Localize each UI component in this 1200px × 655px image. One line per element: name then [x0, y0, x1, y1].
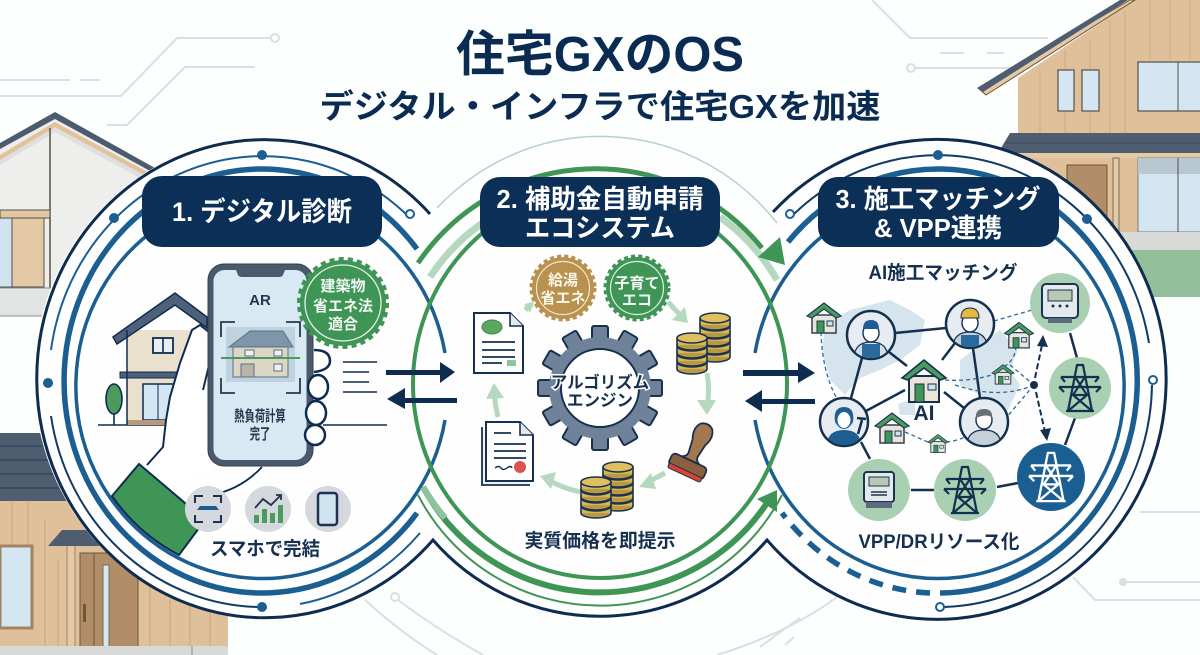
- icon: approved document: [482, 422, 533, 485]
- arrows: between 1 and 2: [386, 362, 457, 409]
- map backdrop: [822, 300, 1020, 420]
- subtitle: デジタル・インフラで住宅GXを加速: [320, 88, 880, 125]
- cycle arrows: [495, 302, 708, 492]
- seal: child eco: 子育て: [614, 275, 660, 292]
- phone text: 熱負荷計算: [234, 408, 309, 425]
- icon: AR scan frame: [221, 322, 300, 393]
- icon: worker 1: [847, 311, 895, 359]
- seal: hot water: 給湯: [548, 272, 578, 289]
- arrows: between 2 and 3: [743, 362, 815, 412]
- icon: coins upper: [677, 313, 730, 374]
- icon: worker 4: [960, 398, 1008, 446]
- label: algorithm engine: エンジン: [567, 392, 633, 410]
- icon: smartphone: [305, 486, 351, 532]
- heading: panel 3: & VPP連携: [874, 213, 1002, 243]
- icon: tower highlighted: [1017, 443, 1085, 511]
- label: AR: AR: [249, 292, 271, 309]
- seal: hot water: 省エネ: [540, 289, 586, 307]
- icon: smart meter lower: [848, 459, 910, 521]
- rings: circle 3: [755, 150, 1157, 611]
- icon: phone: [208, 264, 313, 466]
- heading: panel 3: 3. 施工マッチング: [836, 184, 1040, 214]
- icons: small houses: [807, 303, 1033, 452]
- panel: 3 matching and VPP: [807, 177, 1111, 553]
- house: lower left: [0, 433, 228, 655]
- icon: worker 2: [946, 300, 994, 348]
- badge: building energy law: 適合: [328, 315, 358, 333]
- panel: 2 subsidy ecosystem: [474, 177, 730, 552]
- badge: building energy law: 建築物: [320, 277, 366, 295]
- heading: panel 3: [818, 177, 1059, 247]
- icon: stamp: [666, 416, 725, 483]
- icon: application form: [474, 313, 523, 373]
- circle backgrounds: [34, 139, 1167, 620]
- rings: circle 2 green: [413, 136, 787, 606]
- icon: smart meter upper: [1030, 273, 1090, 333]
- phone text: 完了: [250, 425, 270, 443]
- heading: panel 2: エコシステム: [525, 213, 675, 243]
- seal: child eco: [606, 257, 668, 319]
- icon: ground line: [98, 424, 387, 426]
- house: upper right: [977, 0, 1200, 297]
- caption: panel 2: 実質価格を即提示: [524, 530, 676, 552]
- heading: panel 2: [480, 177, 720, 247]
- icon: hand: [147, 325, 212, 485]
- outer navy outline of three circles: [37, 139, 1166, 619]
- icon: gear: [538, 326, 662, 450]
- connector curve: [223, 467, 262, 492]
- icon: tower lower: [934, 459, 996, 521]
- heading: panel 2: 2. 補助金自動申請: [496, 184, 704, 214]
- heading: panel 1: 1. デジタル診断: [172, 196, 352, 227]
- label: AI: AI: [914, 402, 934, 425]
- title: 住宅GXのOS: [456, 28, 744, 82]
- dashed double arrow: [1030, 335, 1051, 441]
- seal: hot water: [532, 257, 594, 319]
- dashed links: [821, 310, 1034, 443]
- icon: fingers: [305, 350, 330, 445]
- rings: circle 1: [43, 150, 445, 612]
- caption: panel 1: スマホで完結: [210, 538, 320, 560]
- subheading: AI matching: AI施工マッチング: [868, 261, 1018, 284]
- icon: central house: [902, 360, 946, 402]
- panel: 1 digital diagnosis: [98, 176, 387, 560]
- badge: building energy law: 省エネ法: [313, 297, 373, 315]
- caption: panel 3: VPP/DRリソース化: [858, 531, 1020, 553]
- label: algorithm engine: [551, 372, 649, 410]
- text lines: [343, 362, 377, 392]
- icon: tree: [106, 384, 122, 425]
- heading: panel 1: [142, 176, 382, 247]
- arrowheads on green ring: [757, 237, 785, 512]
- icon: sleeve: [112, 464, 205, 555]
- cycle arrowheads: [486, 302, 716, 489]
- badge: building energy law: [300, 260, 386, 346]
- network links: [851, 328, 1077, 490]
- icon: scan: [185, 486, 231, 532]
- house: upper left: [0, 112, 155, 316]
- seal: child eco: エコ: [622, 292, 652, 309]
- label: algorithm engine: アルゴリズム: [551, 372, 649, 392]
- icon: coins lower: [581, 462, 633, 518]
- icon: worker 3: [820, 398, 868, 446]
- icon: chart: [245, 486, 291, 532]
- icon: tower right: [1049, 357, 1111, 419]
- icon: house: [113, 293, 207, 425]
